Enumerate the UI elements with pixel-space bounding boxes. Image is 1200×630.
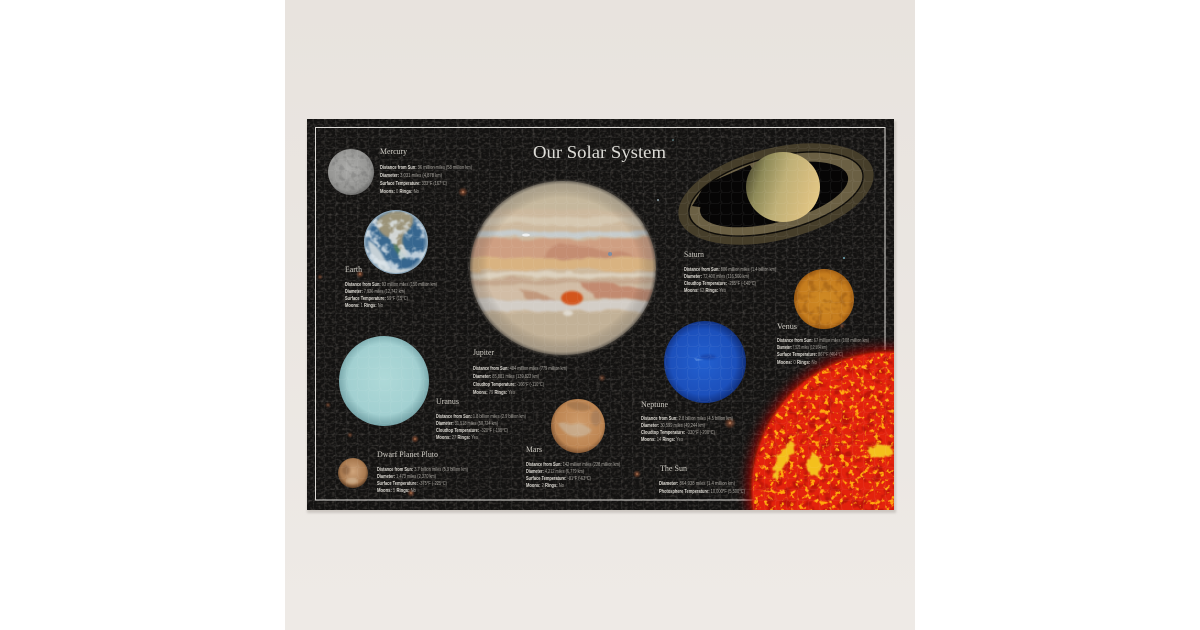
puzzle piece texture overlay (307, 119, 894, 510)
facts: mercury: Moons: 0 Rings: No (380, 189, 419, 195)
icon: mercury (328, 149, 374, 195)
facts: pluto: Diameter: 1,473 miles (2,370 km) (377, 474, 436, 480)
heading: pluto: Dwarf Planet Pluto (377, 449, 438, 459)
facts: mercury (380, 165, 472, 195)
facts: venus (777, 338, 869, 366)
facts: earth: Distance from Sun: 93 million miles (150 million km) (345, 282, 437, 288)
facts: venus: Distance from Sun: 67 million miles (108 million km) (777, 338, 869, 344)
facts: earth: Surface Temperature: 59°F (15°C) (345, 296, 408, 302)
facts: saturn (684, 267, 776, 294)
panel: uranus (339, 336, 526, 441)
facts: mercury: Distance from Sun: 36 million miles (58 million km) (380, 165, 472, 171)
facts: sun: Photosphere Temperature: 10,000°F (5,500°C) (659, 489, 745, 495)
facts: saturn: Cloudtop Temperature: -285°F (-140°C) (684, 281, 756, 287)
facts: uranus: Moons: 27 Rings: Yes (436, 435, 478, 441)
facts: earth: Diameter: 7,926 miles (12,742 km) (345, 289, 405, 295)
facts: earth (345, 282, 437, 309)
facts: saturn: Moons: 62 Rings: Yes (684, 288, 726, 294)
facts: mercury: Surface Temperature: 333°F (167°C) (380, 181, 447, 187)
icon: mars (551, 399, 605, 453)
facts: uranus: Cloudtop Temperature: -320°F (-195°C) (436, 428, 508, 434)
icon: uranus (339, 336, 429, 426)
panel: venus (777, 269, 869, 366)
facts: earth: Moons: 1 Rings: No (345, 303, 383, 309)
wall background (285, 0, 915, 630)
heading: venus: Venus (777, 321, 797, 331)
facts: uranus: Distance from Sun: 1.8 billion miles (2.9 billion km) (436, 414, 526, 420)
title: Our Solar System (533, 142, 666, 162)
facts: neptune: Distance from Sun: 2.8 billion miles (4.5 billion km) (641, 416, 733, 422)
facts: jupiter: Diameter: 85,881 miles (139,822 km) (473, 374, 539, 380)
facts: uranus: Diameter: 31,518 miles (50,724 km) (436, 421, 498, 427)
facts: mars: Surface Temperature: -81°F (-63°C) (526, 476, 591, 482)
facts: jupiter: Distance from Sun: 484 million miles (779 million km) (473, 366, 567, 372)
panel: neptune (641, 321, 746, 443)
icon: neptune (664, 321, 746, 403)
facts: neptune: Moons: 14 Rings: Yes (641, 437, 683, 443)
icon: earth (364, 210, 428, 274)
facts: mars: Moons: 2 Rings: No (526, 483, 564, 489)
white frame border (316, 128, 885, 500)
panel: pluto (338, 449, 468, 494)
facts: mars (526, 462, 620, 489)
facts: venus: Diameter: 7,521 miles (12,104 km) (777, 345, 827, 351)
facts: pluto (377, 467, 468, 494)
icon: saturn (668, 125, 884, 263)
facts: mars: Diameter: 4,212 miles (6,779 km) (526, 469, 584, 475)
facts: uranus (436, 414, 526, 441)
facts: jupiter: Moons: 79 Rings: Yes (473, 390, 515, 396)
facts: neptune: Cloudtop Temperature: -330°F (-200°C) (641, 430, 715, 436)
facts: venus: Moons: 0 Rings: No (777, 360, 817, 366)
icon: venus (794, 269, 854, 329)
facts: mercury: Diameter: 3,031 miles (4,878 km) (380, 173, 442, 179)
facts: saturn: Distance from Sun: 886 million miles (1.4 billion km) (684, 267, 776, 273)
facts: venus: Surface Temperature: 867°F (464°C) (777, 352, 843, 358)
facts: sun: Diameter: 864,938 miles (1.4 million km) (659, 481, 735, 487)
panel: mercury (328, 146, 472, 195)
icon: jupiter (468, 179, 658, 357)
heading: earth: Earth (345, 264, 363, 274)
facts: pluto: Distance from Sun: 3.7 billion miles (5.9 billion km) (377, 467, 468, 473)
panel: mars (526, 399, 620, 489)
panel: earth (345, 210, 437, 309)
facts: sun (659, 481, 745, 495)
background stars (317, 139, 845, 497)
facts: mars: Distance from Sun: 142 million miles (228 million km) (526, 462, 620, 468)
icon: sun (739, 339, 894, 510)
panel: saturn (668, 125, 884, 294)
puzzle board (307, 119, 896, 513)
heading: neptune: Neptune (641, 399, 668, 409)
facts: pluto: Moons: 5 Rings: No (377, 488, 416, 494)
facts: neptune (641, 416, 733, 443)
heading: uranus: Uranus (436, 396, 459, 406)
panel: sun (659, 339, 894, 510)
heading: mercury: Mercury (380, 146, 408, 156)
facts: jupiter (473, 366, 567, 396)
facts: saturn: Diameter: 72,400 miles (116,500 km) (684, 274, 749, 280)
heading: mars: Mars (526, 444, 542, 454)
icon: pluto (338, 458, 368, 488)
facts: jupiter: Cloudtop Temperature: -166°F (-110°C) (473, 382, 544, 388)
panel: jupiter (468, 179, 658, 395)
heading: jupiter: Jupiter (473, 347, 494, 357)
facts: neptune: Diameter: 30,599 miles (49,244 km) (641, 423, 705, 429)
heading: saturn: Saturn (684, 249, 705, 259)
facts: pluto: Surface Temperature: -375°F (-225°C) (377, 481, 447, 487)
heading: sun: The Sun (660, 463, 688, 473)
